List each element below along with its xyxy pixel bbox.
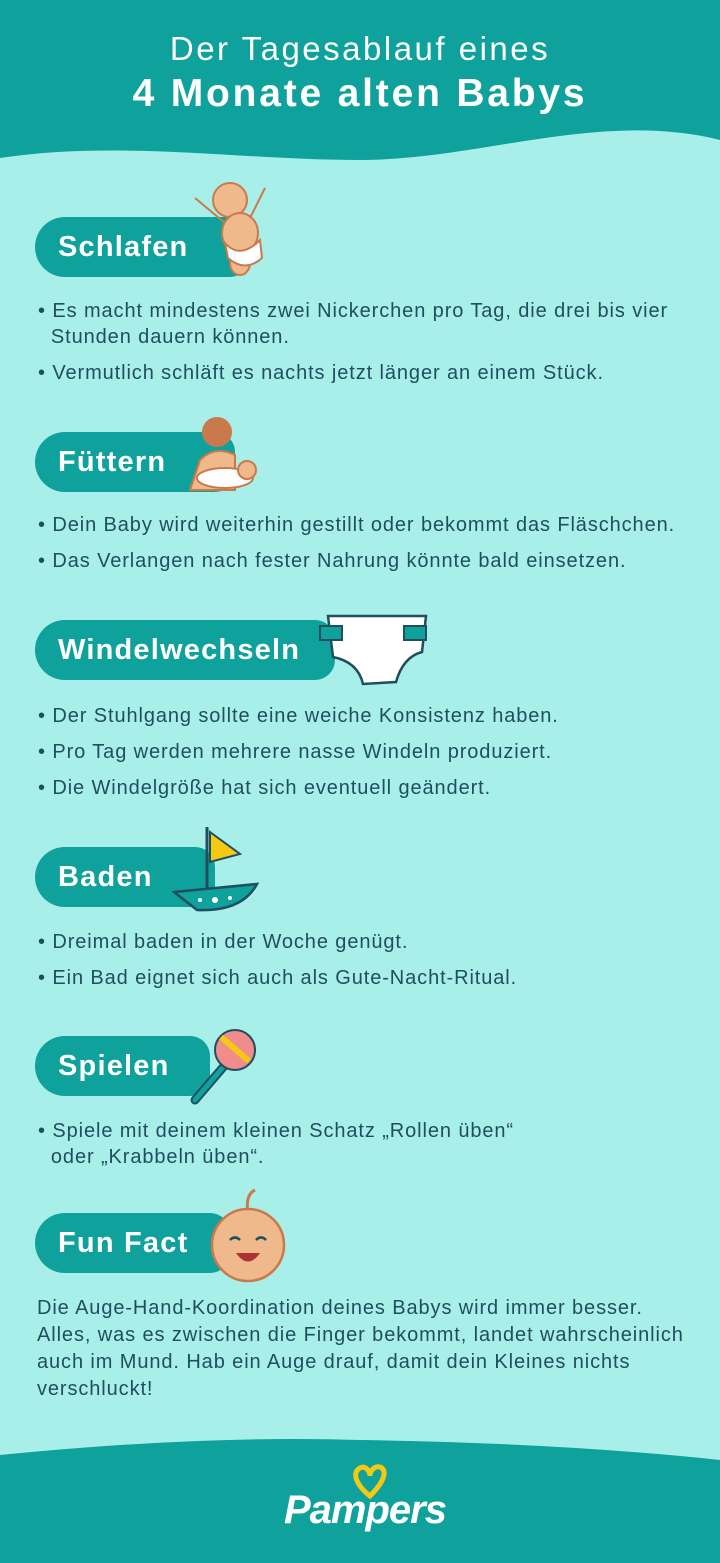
text: Schlafen: • Es macht mindestens zwei Nickerchen pro Tag, die drei bis vier [38, 300, 668, 322]
text: Füttern: • Dein Baby wird weiterhin gestillt oder bekommt das Fläschchen. [38, 514, 675, 536]
text: Fun Fact: auch im Mund. Hab ein Auge drauf, damit dein Kleines nichts [37, 1351, 630, 1373]
text: Füttern [38, 514, 675, 572]
icon: rattle [190, 1029, 256, 1104]
heading: Windelwechseln: Windelwechseln [58, 634, 300, 666]
heading: Spielen [35, 1036, 210, 1096]
heading: Schlafen [35, 217, 250, 277]
heading: Fun Fact: Fun Fact [58, 1227, 188, 1259]
title [133, 30, 587, 115]
icon: baby [194, 182, 266, 276]
title: 4 Monate alten Babys [133, 72, 587, 115]
heading: Baden: Baden [58, 861, 153, 893]
heading: Windelwechseln [35, 620, 335, 680]
heading: Baden [35, 847, 215, 907]
text: Baden [38, 931, 517, 989]
heading: Schlafen: Schlafen [58, 231, 188, 263]
icon: feeding [188, 417, 257, 491]
heading: Fun Fact [35, 1213, 230, 1273]
text: Schlafen [38, 300, 668, 384]
text: Schlafen: • Vermutlich schläft es nachts jetzt länger an einem Stück. [38, 362, 604, 384]
text: Fun Fact: Alles, was es zwischen die Finger bekommt, landet wahrscheinlich [37, 1324, 684, 1346]
text: Spielen: oder „Krabbeln üben“. [51, 1146, 264, 1168]
icon: diaper [319, 614, 428, 686]
text: Spielen [38, 1120, 514, 1168]
text: Schlafen: Stunden dauern können. [51, 326, 290, 348]
heading: Füttern [35, 432, 235, 492]
heading: Füttern: Füttern [58, 446, 166, 478]
icon: boat [172, 827, 260, 912]
footer background [0, 1439, 720, 1563]
text: Baden: • Dreimal baden in der Woche genügt. [38, 931, 408, 953]
text: Baden: • Ein Bad eignet sich auch als Gute-Nacht-Ritual. [38, 967, 517, 989]
text: Fun Fact [37, 1297, 684, 1400]
heading: Spielen: Spielen [58, 1050, 170, 1082]
icon: baby face [210, 1188, 286, 1282]
text: Füttern: • Das Verlangen nach fester Nahrung könnte bald einsetzen. [38, 550, 626, 572]
text: Fun Fact: verschluckt! [37, 1378, 153, 1400]
text: Fun Fact: Die Auge-Hand-Koordination deines Babys wird immer besser. [37, 1297, 643, 1319]
text: Windelwechseln [38, 705, 559, 799]
title: Der Tagesablauf eines [170, 30, 550, 67]
logo: Pampers: Pampers [284, 1488, 446, 1532]
text: Windelwechseln: • Der Stuhlgang sollte eine weiche Konsistenz haben. [38, 705, 559, 727]
text: Spielen: • Spiele mit deinem kleinen Schatz „Rollen üben“ [38, 1120, 514, 1142]
text: Windelwechseln: • Die Windelgröße hat sich eventuell geändert. [38, 777, 491, 799]
header background [0, 0, 720, 160]
text: Windelwechseln: • Pro Tag werden mehrere nasse Windeln produziert. [38, 741, 552, 763]
logo: Pampers [284, 1464, 446, 1532]
